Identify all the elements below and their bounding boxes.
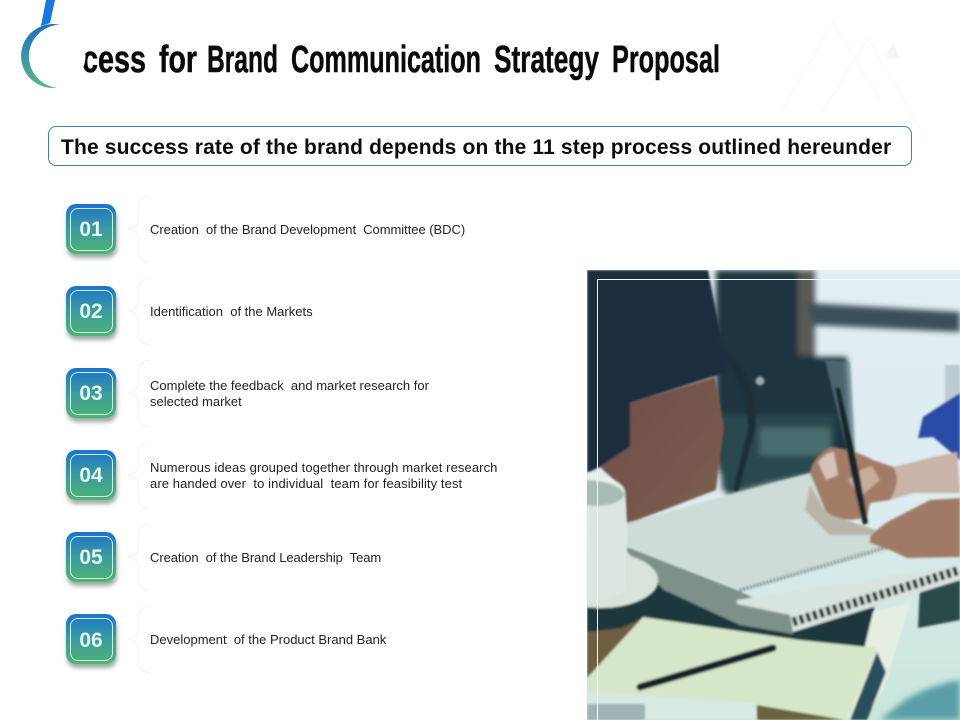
right side paper and table [847,603,910,720]
photo: people writing in notebooks at a table [587,270,960,720]
dark tabletop under the notebooks [587,575,875,680]
title: Process [34,39,146,81]
title: Strategy [494,39,599,81]
second hand [870,498,960,558]
title: Communication [291,39,481,81]
step 04: 04 [79,464,103,487]
step 01 [64,196,465,264]
subtitle box: The success rate of the brand depends on the 11 step process outlined hereunder [61,136,891,159]
step 06 [64,606,386,674]
step 06: 06 [79,629,103,652]
step 01: 01 [79,218,103,241]
step 04 [64,442,497,510]
step 05: Creation of the Brand Leadership Team [150,550,381,565]
title: Brand [207,39,278,81]
step 02 [64,278,313,346]
step 03 [64,360,429,428]
step 06: Development of the Product Brand Bank [150,632,386,647]
subtitle box [48,126,912,166]
lower notebook and pen [587,617,877,720]
step 05: 05 [79,546,103,569]
step 03: 03 [79,382,103,405]
step 03: Complete the feedback and market research for selected market [150,378,429,409]
step 01: Creation of the Brand Development Committee (BDC) [150,222,465,237]
title [34,39,720,81]
step 02: Identification of the Markets [150,304,313,319]
cup and saucer [544,552,658,608]
title: for [159,39,197,81]
step 05 [64,524,381,592]
step 02: 02 [79,300,103,323]
photo white frame line [597,279,960,720]
main notebook [627,547,793,634]
logo crescent with handle [21,0,86,88]
step 04: Numerous ideas grouped together through market research are handed over to individual team for feasibility test [150,460,497,491]
background mountain watermark [885,44,900,58]
